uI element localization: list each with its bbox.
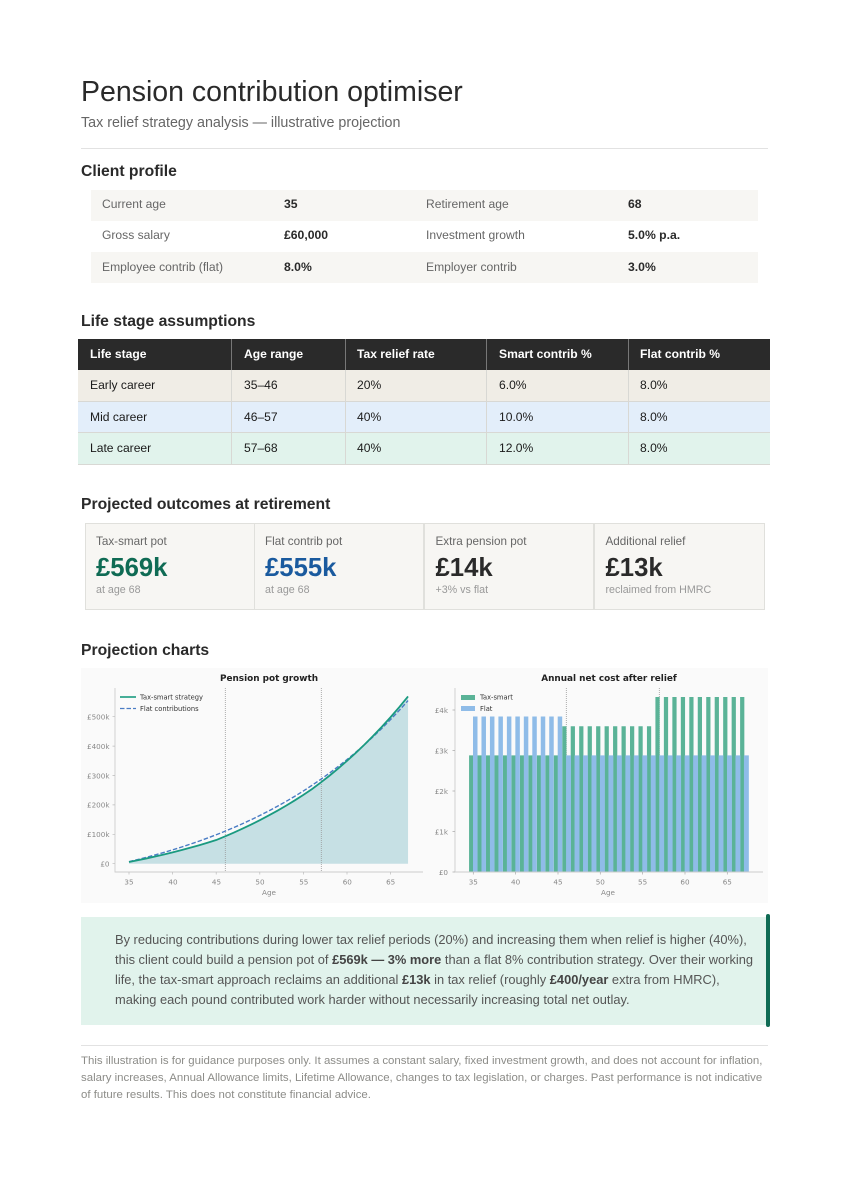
panel: client profile — [91, 190, 758, 283]
metric: flat contrib pot — [254, 523, 424, 610]
footer disclaimer: of future results. This does not constitute financial advice. — [81, 1089, 371, 1101]
chart: annual net cost: 60 — [680, 878, 690, 886]
chart: annual net cost — [435, 674, 763, 897]
row: late career: 57–68 — [244, 441, 278, 455]
callout text: life, the tax-smart approach reclaims an additional £13k in tax relief (roughly £400/year extra from HMRC), — [115, 972, 720, 987]
chart: pension pot growth: £200k — [87, 801, 110, 810]
panel: metric cards — [85, 523, 765, 610]
flat bars — [473, 794, 752, 814]
metric: flat contrib pot: £555k — [265, 554, 336, 582]
chart: pension pot growth: £400k — [87, 742, 110, 751]
chart: pension pot growth: £0 — [100, 860, 110, 868]
legend: Flat contributions — [140, 705, 199, 713]
row: mid career: 8.0% — [640, 410, 668, 424]
footer disclaimer: salary increases, Annual Allowance limits, Lifetime Allowance, changes to tax legislation, or charges. Past performance is not indicative — [81, 1072, 762, 1084]
chart: pension pot growth: 50 — [255, 878, 265, 886]
table header: Smart contrib % — [499, 347, 592, 361]
smart bars — [469, 784, 748, 814]
chart: annual net cost: 35 — [469, 878, 478, 886]
profile row 2 — [102, 228, 680, 242]
legend — [461, 694, 513, 713]
row: early career: 20% — [357, 378, 381, 392]
profile row 1: 68 — [628, 197, 642, 211]
row: late career: Late career — [90, 441, 151, 455]
metric: tax-smart pot — [85, 523, 255, 610]
table header — [78, 339, 770, 370]
chart: annual net cost: 55 — [638, 878, 647, 886]
heading: client profile: Client profile — [81, 163, 177, 180]
chart: annual net cost: 65 — [723, 878, 732, 886]
chart: pension pot growth: Age — [262, 888, 277, 897]
metric: additional relief: £13k — [606, 554, 663, 582]
metric: flat contrib pot: Flat contrib pot — [265, 535, 342, 548]
metric: additional relief — [594, 523, 765, 610]
chart: annual net cost: £2k — [435, 787, 449, 796]
chart: annual net cost: Age — [601, 888, 616, 897]
row: mid career: 40% — [357, 410, 381, 424]
heading: life stage assumptions: Life stage assumptions — [81, 313, 255, 330]
row: mid career — [78, 402, 770, 433]
chart: annual net cost: £0 — [439, 868, 448, 877]
chart: annual net cost: 50 — [596, 878, 605, 886]
chart panel background — [81, 668, 768, 903]
callout text: By reducing contributions during lower tax relief periods (20%) and increasing them when relief is higher (40%), — [115, 932, 747, 947]
row: early career: 8.0% — [640, 378, 668, 392]
chart: annual net cost: £4k — [435, 706, 449, 715]
chart: annual net cost: 45 — [553, 878, 563, 886]
legend: Tax-smart strategy — [139, 694, 203, 702]
profile row 2: Investment growth — [426, 228, 525, 242]
table header: Age range — [244, 347, 303, 361]
chart: pension pot growth: 60 — [343, 878, 352, 886]
metric: extra pension pot: +3% vs flat — [436, 584, 488, 596]
heading: projected outcomes: Projected outcomes at retirement — [81, 496, 330, 513]
profile row 3: Employer contrib — [426, 260, 517, 274]
callout accent bar — [766, 914, 770, 1027]
chart: pension pot growth: 45 — [212, 878, 221, 886]
callout text — [115, 932, 753, 1007]
row: mid career: Mid career — [90, 410, 147, 424]
row: early career: Early career — [90, 378, 155, 392]
table header: Life stage — [90, 347, 146, 361]
footer disclaimer — [81, 1055, 762, 1101]
chart title: Pension pot growth — [220, 674, 318, 684]
table header: Tax relief rate — [357, 347, 435, 361]
callout text: this client could build a pension pot of £569k — 3% more than a flat 8% contribution strategy. Over their working — [115, 952, 753, 967]
callout — [81, 917, 768, 1025]
chart: annual net cost: £1k — [435, 828, 449, 836]
title: Pension contribution optimiser — [81, 76, 463, 108]
callout text: making each pound contributed work harder without necessarily increasing total net outlay. — [115, 992, 630, 1007]
legend — [120, 694, 203, 713]
metric: extra pension pot — [424, 523, 594, 610]
subtitle: Tax relief strategy analysis — illustrative projection — [81, 115, 400, 131]
row: early career — [78, 370, 770, 402]
row: early career: 6.0% — [499, 378, 527, 392]
chart: pension pot growth: £300k — [87, 771, 110, 780]
profile row 1: 35 — [284, 197, 298, 211]
metric: tax-smart pot: Tax-smart pot — [96, 535, 167, 548]
chart: pension pot growth: 55 — [299, 878, 308, 886]
chart: annual net cost: £3k — [435, 746, 449, 756]
row: late career — [78, 433, 770, 465]
profile row 1: Retirement age — [426, 197, 509, 211]
profile row 2: Gross salary — [102, 228, 170, 242]
row: late career: 40% — [357, 441, 381, 455]
profile row 3: 8.0% — [284, 260, 312, 274]
chart: pension pot growth: 35 — [124, 878, 134, 886]
row: late career: 8.0% — [640, 441, 668, 455]
chart title: Annual net cost after relief — [541, 674, 677, 684]
metric: extra pension pot: £14k — [436, 554, 493, 582]
heading: projection charts: Projection charts — [81, 642, 209, 659]
row: mid career: 10.0% — [499, 410, 533, 424]
table header: Flat contrib % — [640, 347, 720, 361]
metric: flat contrib pot: at age 68 — [265, 584, 310, 596]
chart: pension pot growth: £100k — [87, 830, 110, 839]
legend: Flat — [480, 705, 493, 713]
profile row 2: 5.0% p.a. — [628, 228, 680, 242]
profile row 3: Employee contrib (flat) — [102, 260, 223, 274]
chart: pension pot growth — [87, 674, 423, 897]
footer disclaimer: This illustration is for guidance purposes only. It assumes a constant salary, fixed investment growth, and does not account for inflation, — [81, 1055, 762, 1067]
chart: annual net cost: 40 — [511, 878, 521, 886]
profile row 2: £60,000 — [284, 228, 328, 242]
profile row 1: Current age — [102, 197, 166, 211]
profile row 3: 3.0% — [628, 260, 656, 274]
profile row 3 — [91, 252, 758, 283]
row: late career: 12.0% — [499, 441, 533, 455]
chart: pension pot growth: 40 — [168, 878, 178, 886]
profile row 1 — [91, 190, 758, 221]
legend: Tax-smart — [479, 694, 513, 702]
metric: extra pension pot: Extra pension pot — [436, 535, 526, 548]
metric: additional relief: reclaimed from HMRC — [606, 584, 711, 596]
row: mid career: 46–57 — [244, 410, 278, 424]
metric: tax-smart pot: £569k — [96, 554, 167, 582]
metric: additional relief: Additional relief — [606, 535, 685, 548]
metric: tax-smart pot: at age 68 — [96, 584, 141, 596]
chart: pension pot growth: £500k — [87, 712, 110, 722]
row: early career: 35–46 — [244, 378, 278, 392]
table: life stage assumptions — [78, 339, 770, 465]
chart: pension pot growth: 65 — [386, 878, 395, 886]
